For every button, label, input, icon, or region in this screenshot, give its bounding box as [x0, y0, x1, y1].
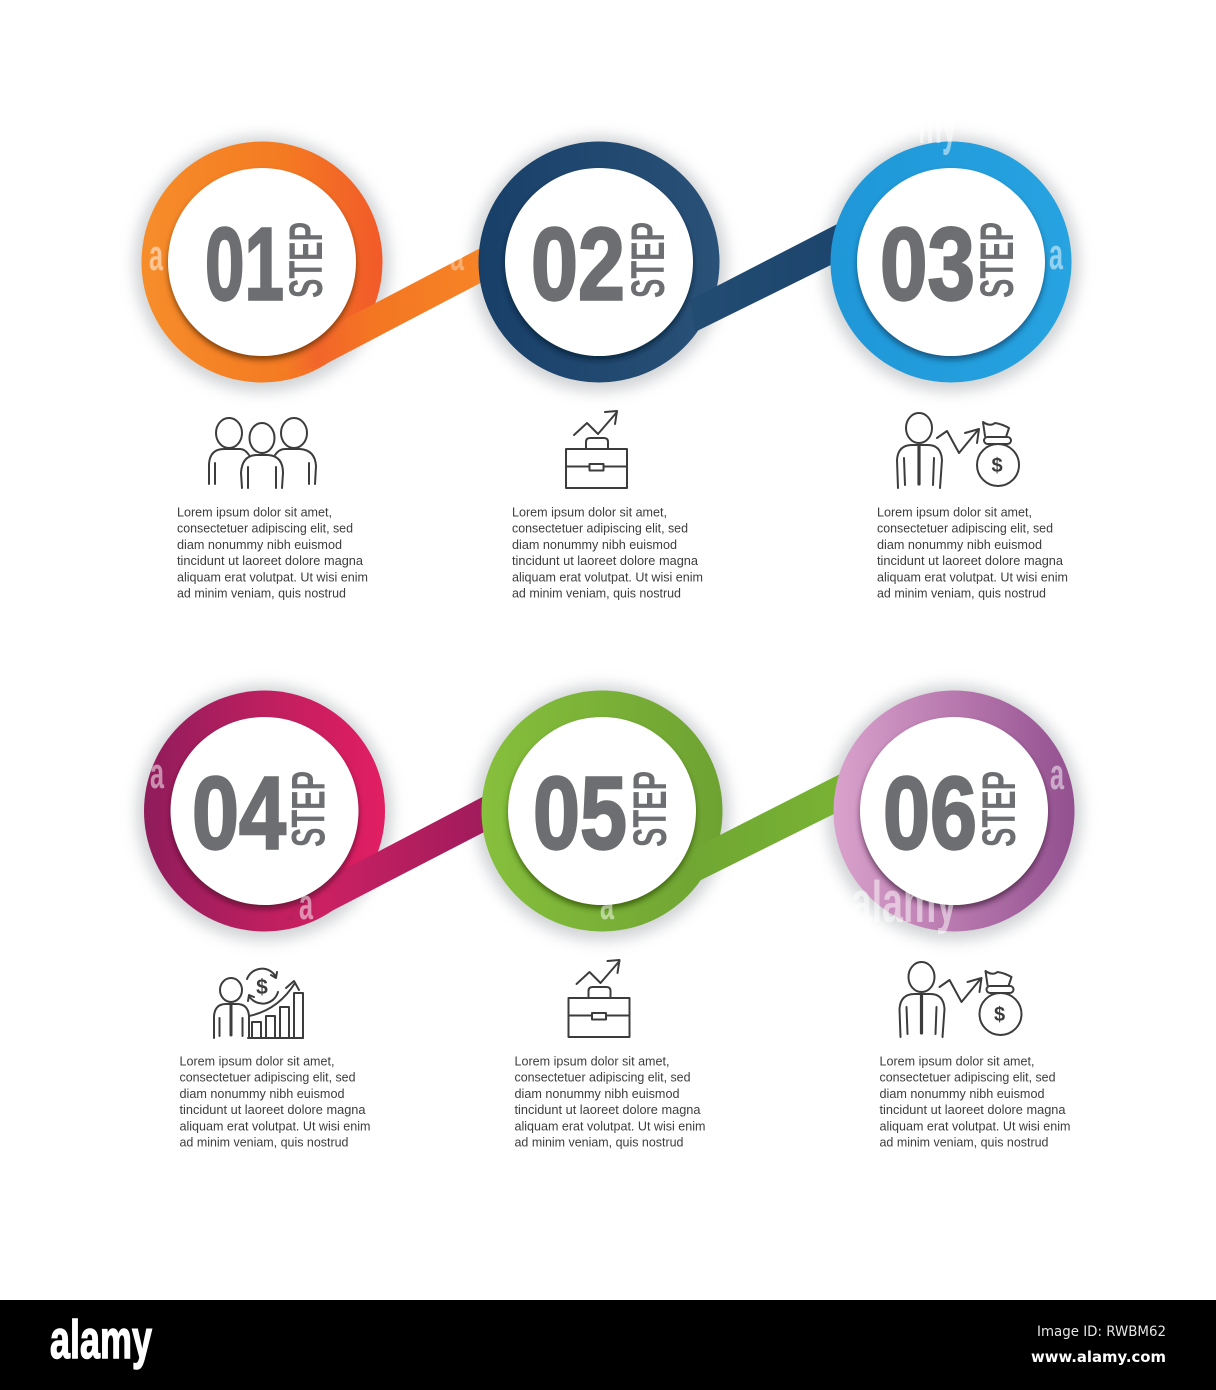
- text block 02: aliquam erat volutpat. Ut wisi enim: [512, 570, 703, 584]
- watermark letters: a: [1050, 750, 1064, 799]
- panel: step 02 circle: [478, 142, 845, 382]
- icon: team of three people: [209, 418, 316, 488]
- text block 02: [512, 506, 703, 600]
- icon: briefcase with rising arrow: [566, 411, 627, 488]
- icon glyph: dollar sign: $: [994, 1004, 1005, 1026]
- panel: step 05 circle: [482, 690, 848, 932]
- text block 01: aliquam erat volutpat. Ut wisi enim: [177, 570, 368, 584]
- text block 04: diam nonummy nibh euismod: [180, 1087, 345, 1101]
- text block 04: Lorem ipsum dolor sit amet,: [180, 1054, 334, 1068]
- text block 01: consectetuer adipiscing elit, sed: [177, 522, 353, 536]
- text block 01: diam nonummy nibh euismod: [177, 538, 342, 552]
- panel: step 01 circle: [142, 142, 490, 382]
- watermark letters: a: [450, 231, 464, 280]
- step label 05: STEP: [623, 771, 676, 847]
- text block 06: tincidunt ut laoreet dolore magna: [880, 1103, 1066, 1117]
- text block 03: consectetuer adipiscing elit, sed: [877, 522, 1053, 536]
- text block 04: consectetuer adipiscing elit, sed: [180, 1071, 356, 1085]
- text block 03: diam nonummy nibh euismod: [877, 538, 1042, 552]
- text block 06: ad minim veniam, quis nostrud: [880, 1136, 1049, 1150]
- footer url: www.alamy.com: [1031, 1348, 1166, 1366]
- text block 03: tincidunt ut laoreet dolore magna: [877, 554, 1063, 568]
- watermark letters: [149, 91, 1064, 935]
- text block 01: Lorem ipsum dolor sit amet,: [177, 506, 332, 520]
- soft halos behind circles: [134, 136, 1082, 941]
- watermark letters: a: [150, 749, 164, 798]
- text block 02: Lorem ipsum dolor sit amet,: [512, 506, 667, 520]
- watermark letters: a: [600, 880, 614, 929]
- panel: step 06 circle: [834, 690, 1074, 932]
- panel: step 03 circle: [830, 142, 1072, 382]
- step number 02: 02: [531, 206, 625, 322]
- text block 03: [877, 506, 1068, 600]
- step number 05: 05: [533, 756, 627, 870]
- text block 05: consectetuer adipiscing elit, sed: [514, 1071, 691, 1085]
- text block 05: diam nonummy nibh euismod: [514, 1087, 680, 1101]
- text block 02: consectetuer adipiscing elit, sed: [512, 522, 688, 536]
- text block 03: ad minim veniam, quis nostrud: [877, 586, 1046, 600]
- text block 05: [514, 1054, 706, 1150]
- text block 01: tincidunt ut laoreet dolore magna: [177, 554, 363, 568]
- step label 06: STEP: [972, 771, 1025, 847]
- step number 03: 03: [880, 206, 975, 322]
- text block 01: [177, 506, 368, 600]
- text block 03: Lorem ipsum dolor sit amet,: [877, 506, 1032, 520]
- watermark letters: a: [1049, 230, 1063, 279]
- text block 02: diam nonummy nibh euismod: [512, 538, 677, 552]
- icon: businessman and money bag: [900, 962, 1022, 1037]
- text block 06: diam nonummy nibh euismod: [880, 1087, 1045, 1101]
- text block 03: aliquam erat volutpat. Ut wisi enim: [877, 570, 1068, 584]
- text block 06: [880, 1054, 1070, 1150]
- connector: step 05 to 06: [692, 770, 848, 882]
- icon glyph: dollar sign: $: [256, 976, 268, 999]
- text block 05: ad minim veniam, quis nostrud: [514, 1136, 684, 1150]
- icon glyph: dollar sign: $: [991, 455, 1003, 477]
- icon: briefcase with rising arrow: [568, 960, 630, 1037]
- text block 04: aliquam erat volutpat. Ut wisi enim: [180, 1119, 370, 1133]
- step number 01: 01: [205, 206, 284, 322]
- text block 05: aliquam erat volutpat. Ut wisi enim: [514, 1119, 706, 1133]
- text block 04: [180, 1054, 370, 1150]
- icon: businessman and money bag: [897, 413, 1019, 488]
- footer bar: [0, 1300, 1216, 1390]
- text block 05: tincidunt ut laoreet dolore magna: [514, 1103, 701, 1117]
- text block 05: Lorem ipsum dolor sit amet,: [514, 1054, 670, 1068]
- text block 02: tincidunt ut laoreet dolore magna: [512, 554, 698, 568]
- text block 04: tincidunt ut laoreet dolore magna: [180, 1103, 366, 1117]
- step label 04: STEP: [282, 771, 334, 847]
- footer image id: Image ID: RWBM62: [1037, 1324, 1166, 1340]
- text block 01: ad minim veniam, quis nostrud: [177, 586, 346, 600]
- icon: businessman with dollar cycle and bar chart: [214, 969, 303, 1038]
- connector: step 01 to 02: [280, 243, 490, 372]
- text block 06: consectetuer adipiscing elit, sed: [880, 1071, 1056, 1085]
- step number 06: 06: [883, 756, 977, 870]
- connector: step 04 to 05: [285, 792, 492, 921]
- watermark letters: a: [299, 880, 313, 929]
- step label 02: STEP: [621, 222, 674, 298]
- text block 06: aliquam erat volutpat. Ut wisi enim: [880, 1119, 1070, 1133]
- footer logo: alamy: [50, 1310, 152, 1370]
- text block 02: ad minim veniam, quis nostrud: [512, 586, 681, 600]
- text block 04: ad minim veniam, quis nostrud: [180, 1136, 349, 1150]
- step label 01: STEP: [279, 222, 332, 298]
- step label 03: STEP: [970, 222, 1023, 298]
- text block 06: Lorem ipsum dolor sit amet,: [880, 1054, 1034, 1068]
- watermark letters: a: [149, 231, 163, 280]
- watermark letters: my: [918, 91, 957, 156]
- connector: step 02 to 03: [690, 220, 845, 332]
- step number 04: 04: [192, 756, 286, 870]
- watermark letters: alamy: [851, 870, 957, 935]
- panel: step 04 circle: [144, 690, 492, 932]
